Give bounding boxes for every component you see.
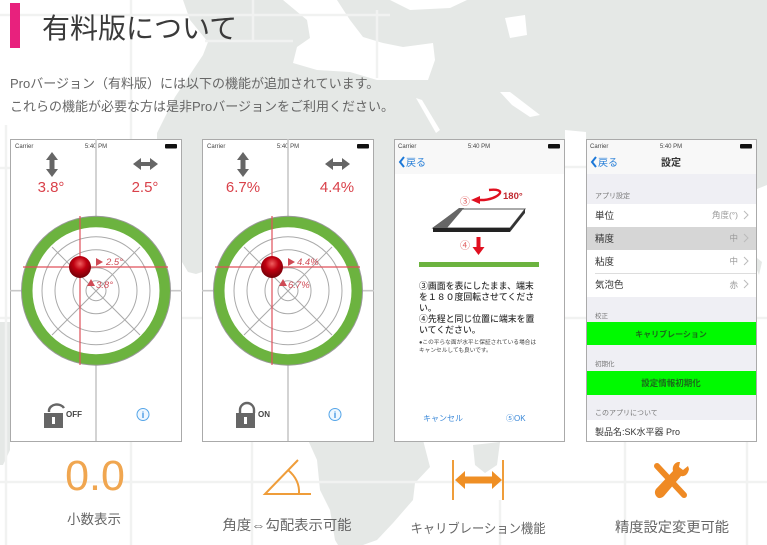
- intro text: これらの機能が必要な方は是非Proバージョンをご利用ください。: [10, 99, 394, 114]
- feature: decimal display: [65, 452, 125, 527]
- panel: settings screen: 5:40 PM: [660, 144, 682, 150]
- icon: 0.0: 0.0: [65, 452, 125, 500]
- note: キャンセルしても良いです。: [419, 346, 492, 354]
- calibration section: 校正: [595, 311, 608, 320]
- reading: horizontal: 2.5°: [132, 179, 158, 196]
- settings list: 中: [729, 233, 738, 243]
- panel: calibration screen: 5:40 PM: [468, 144, 490, 150]
- calibration section: [587, 311, 756, 345]
- illustration: phone rotation: 180°: [503, 191, 523, 202]
- settings list: [587, 192, 756, 297]
- panel: level screen percent: 5:40 PM: [277, 144, 299, 150]
- label: 角度⇔勾配表示可能: [222, 517, 352, 533]
- back button: 戻る: [598, 157, 618, 169]
- bubble: [69, 256, 91, 278]
- panel: settings screen: [586, 140, 756, 442]
- settings list: 単位: [595, 210, 614, 222]
- bubble: [261, 256, 283, 278]
- icon: info: i: [142, 410, 144, 420]
- bubble labels: 4.4%: [297, 257, 319, 268]
- label: キャリブレーション機能: [410, 521, 546, 536]
- level ring: [22, 216, 170, 365]
- intro text: [10, 76, 394, 114]
- bubble labels: [87, 257, 123, 291]
- icon: angle: [265, 460, 311, 494]
- calibration section: キャリブレーション: [635, 329, 707, 339]
- accent bar: [10, 3, 20, 48]
- nav title: 設定: [661, 157, 681, 169]
- icon: wrench and screwdriver: [657, 466, 684, 495]
- reset section: [587, 359, 756, 395]
- reset section: 設定情報初期化: [641, 378, 701, 388]
- bubble labels: [279, 257, 319, 291]
- instructions: を１８０度回転させてくださ: [419, 291, 534, 302]
- instructions: いてください。: [419, 325, 481, 335]
- label: 小数表示: [67, 512, 121, 527]
- green level bar: [419, 262, 539, 267]
- reading: vertical: 6.7%: [226, 179, 260, 196]
- panel: level screen percent: [202, 139, 374, 442]
- icon: info: i: [334, 410, 336, 420]
- icon: locked padlock: ON: [258, 410, 270, 419]
- icon: unlocked padlock: [44, 405, 82, 428]
- icon: horizontal arrow: [325, 158, 350, 170]
- about section: このアプリについて: [595, 409, 658, 417]
- panel: settings screen: Carrier: [590, 144, 608, 150]
- bubble labels: 2.5°: [105, 257, 123, 268]
- icon: width arrow: [453, 460, 503, 500]
- reading: horizontal: 4.4%: [320, 179, 354, 196]
- feature: precision settings: [615, 462, 729, 535]
- icon: horizontal arrow: [133, 158, 158, 170]
- reset section: 初期化: [595, 359, 615, 368]
- settings list: 精度: [595, 233, 614, 245]
- title: 有料版について: [42, 13, 237, 44]
- illustration: phone rotation: [433, 190, 525, 255]
- intro text: Proバージョン（有料版）には以下の機能が追加されています。: [10, 76, 379, 91]
- ok button: ⑤OK: [506, 414, 526, 423]
- icon: locked padlock: [236, 403, 270, 428]
- icon: unlocked padlock: OFF: [66, 410, 82, 419]
- bubble labels: 3.8°: [96, 280, 113, 291]
- settings list: 赤: [729, 280, 738, 290]
- instructions: ④先程と同じ位置に端末を置: [419, 313, 534, 324]
- label: 精度設定変更可能: [615, 519, 729, 535]
- about section: 製品名:SK水平器 Pro: [595, 426, 680, 437]
- settings list: 気泡色: [595, 279, 624, 291]
- illustration: phone rotation: ④: [460, 240, 470, 252]
- instructions: ③画面を表にしたまま、端末: [419, 280, 534, 291]
- illustration: phone rotation: ③: [460, 196, 470, 208]
- panel: level screen degrees: [10, 139, 182, 442]
- about section: [587, 409, 756, 441]
- settings list: 角度(°): [712, 210, 738, 220]
- cancel button: キャンセル: [423, 414, 463, 423]
- bubble labels: 6.7%: [288, 280, 310, 291]
- level ring: [214, 216, 362, 365]
- icon: vertical arrow: [237, 152, 249, 177]
- settings list: 粘度: [595, 256, 614, 268]
- icon: info: [137, 408, 149, 420]
- icon: info: [329, 408, 341, 420]
- panel: calibration screen: Carrier: [398, 144, 416, 150]
- instructions: い。: [419, 303, 437, 313]
- panel: level screen degrees: 5:40 PM: [85, 144, 107, 150]
- settings list: アプリ設定: [595, 192, 630, 200]
- back button: 戻る: [406, 157, 426, 169]
- reading: vertical: 3.8°: [38, 179, 64, 196]
- panel: level screen degrees: Carrier: [15, 144, 33, 150]
- panel: level screen percent: Carrier: [207, 144, 225, 150]
- icon: vertical arrow: [46, 152, 58, 177]
- settings list: 中: [729, 256, 738, 266]
- note: ●この平らな面が水平と保証されている場合は: [419, 338, 536, 346]
- feature: angle and slope: [222, 460, 352, 533]
- panel: calibration screen: [394, 140, 564, 442]
- feature: calibration: [410, 460, 546, 536]
